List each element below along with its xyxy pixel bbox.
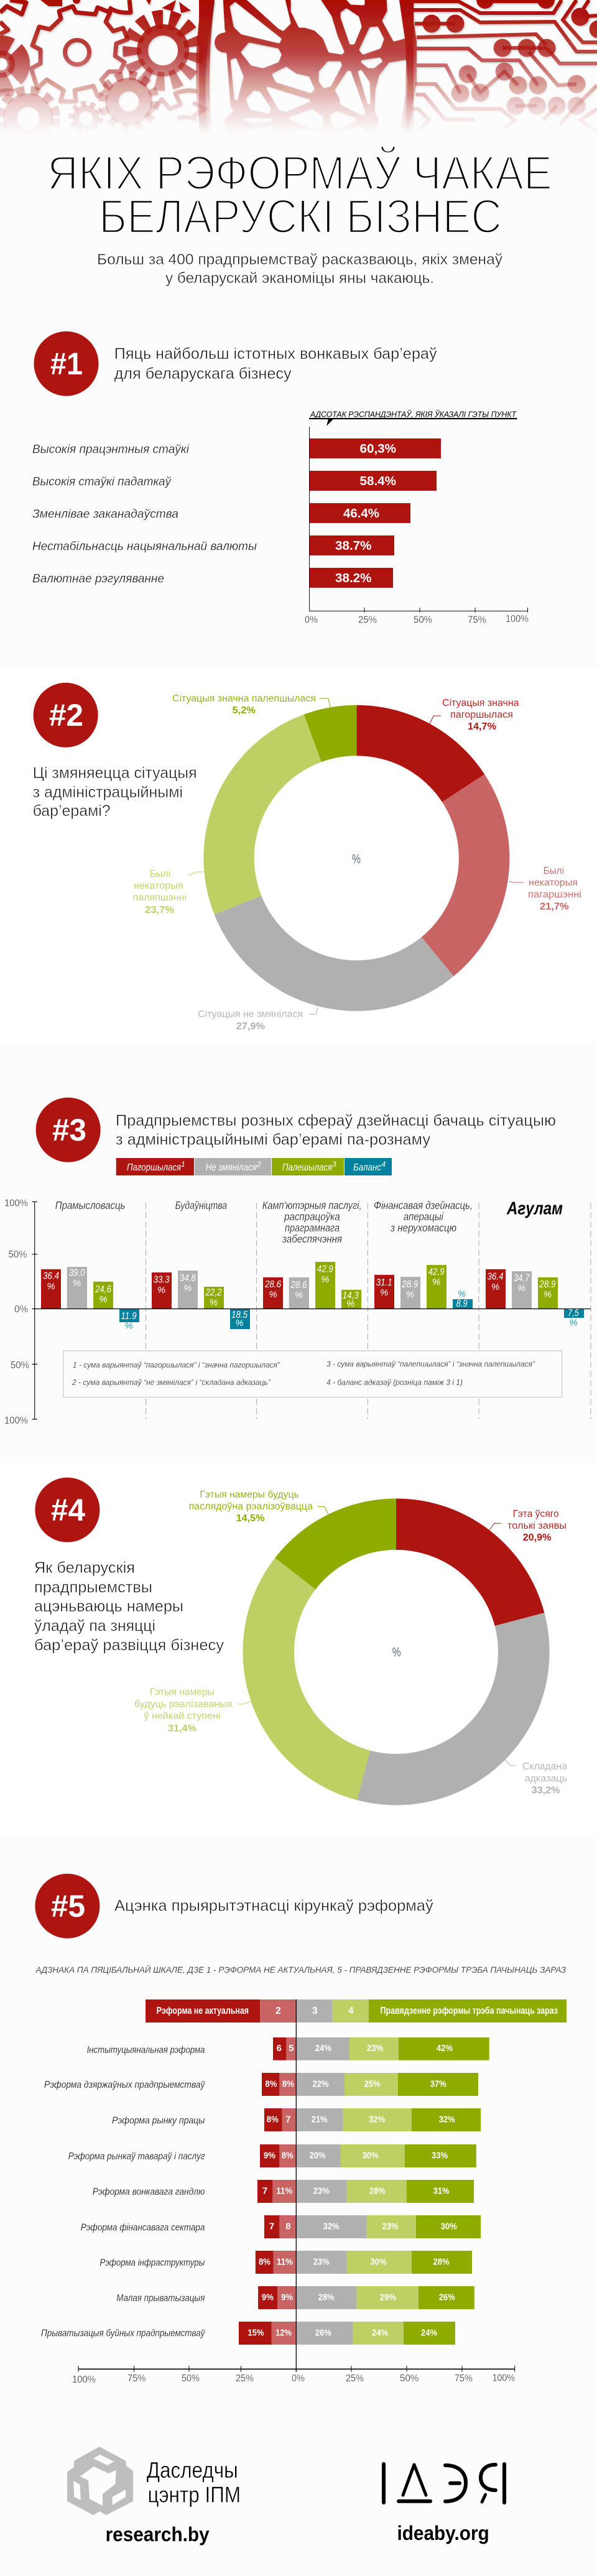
bar values: %	[124, 1321, 133, 1332]
heading 1: Пяць найбольш істотных вонкавых бар’ераў	[114, 345, 437, 363]
heading 4: бар’ераў развіцця бізнесу	[34, 1637, 224, 1654]
axis: 50%	[400, 2373, 419, 2384]
row: labour market: Рэформа рынку працы	[112, 2116, 205, 2126]
vertical axis: 0%	[14, 1304, 28, 1315]
row: goods and services: 30%	[363, 2151, 379, 2161]
label: unchanged	[198, 1008, 318, 1032]
legend: Палешылася	[282, 1162, 332, 1173]
label: some improvement	[133, 869, 204, 915]
row: large privatisation: 26%	[315, 2328, 331, 2338]
badge #5: #5	[51, 1889, 85, 1924]
label: some improvement: некаторыя	[134, 881, 183, 891]
badge #4	[35, 1478, 100, 1542]
label: implemented to some degree: Гэтыя намеры	[150, 1687, 215, 1698]
axis: 25%	[236, 2373, 254, 2384]
panel: section 2 background	[0, 669, 597, 1042]
legend: 4	[382, 1160, 386, 1169]
heading 2: бар’ерамі?	[33, 802, 111, 820]
title: ЯКІХ РЭФОРМАЎ ЧАКАЕ	[47, 146, 552, 200]
row: small privatisation: Малая прыватызацыя	[116, 2293, 205, 2304]
sector titles: Прамысловасць	[55, 1199, 125, 1212]
row: goods and services: Рэформа рынкаў тавараў і паслуг	[68, 2151, 205, 2162]
scale legend: 2	[275, 2006, 281, 2016]
axis: 100%	[72, 2374, 96, 2385]
row: state enterprises: 22%	[312, 2079, 328, 2090]
label: implemented gradually: паслядоўна рэалізоўвацца	[189, 1501, 313, 1512]
badge #2	[34, 683, 98, 748]
row: institutional reform: 6	[277, 2043, 282, 2054]
bar values: %	[47, 1281, 55, 1292]
sector titles: распрацоўка	[284, 1210, 340, 1223]
bar values: 31.1	[376, 1277, 392, 1288]
bar values: 18.5	[231, 1310, 248, 1320]
notes box: 1 - сума варыянтаў “пагоршылася” і “значна пагоршылася”	[73, 1360, 280, 1369]
scale caption: АДЗНАКА ПА ПЯЦІБАЛЬНАЙ ШКАЛЕ, ДЗЕ 1 - РЭФОРМА НЕ АКТУАЛЬНАЯ, 5 - ПРАВЯДЗЕННЕ РЭФОРМЫ ТРЭБА ПАЧЫНАЦЬ ЗАРАЗ	[35, 1964, 566, 1975]
label: unchanged: Сітуацыя не змянілася	[198, 1009, 303, 1020]
label: some worsening: некаторыя	[529, 878, 578, 888]
bar chart: barriers	[32, 427, 529, 625]
label: implemented to some degree: ў нейкай ступені	[144, 1711, 220, 1721]
bar values: %	[346, 1299, 354, 1309]
heading 4	[34, 1559, 224, 1654]
badge #3: #3	[52, 1113, 86, 1147]
scale legend: 4	[348, 2006, 354, 2016]
donut chart 4	[243, 1499, 550, 1805]
legend: Баланс	[353, 1162, 381, 1173]
footer logo: IDEA	[384, 2464, 504, 2544]
bar values: %	[295, 1290, 303, 1300]
row: large privatisation: 24%	[421, 2328, 437, 2338]
label: much better: Сітуацыя значна палепшылася	[172, 693, 316, 704]
subtitle: у беларускай эканоміцы яны чакаюць.	[165, 270, 434, 287]
scale legend	[146, 1999, 567, 2022]
label: much better: 5,2%	[233, 705, 256, 716]
bar values: %	[432, 1277, 440, 1287]
heading 4: ўладаў па зняцці	[34, 1617, 155, 1634]
badge #1	[34, 331, 98, 396]
bar values: %	[491, 1282, 499, 1292]
label: implemented to some degree	[134, 1687, 251, 1734]
vertical axis: 100%	[4, 1198, 28, 1209]
bar values: 33.3	[154, 1274, 170, 1285]
label: implemented gradually: Гэтыя намеры будуць	[200, 1490, 299, 1500]
bar values: %	[99, 1294, 108, 1305]
legend: 2	[256, 1160, 261, 1169]
vertical axis: 50%	[11, 1360, 29, 1371]
bar values: 42.9	[428, 1267, 445, 1277]
vertical axis	[4, 1198, 37, 1426]
axis: 50%	[182, 2373, 200, 2384]
bar values: 36.4	[488, 1272, 504, 1282]
row: small privatisation: 9%	[262, 2292, 274, 2303]
label: some worsening: 21,7%	[540, 902, 569, 912]
panel: section 4 intentions	[34, 1478, 567, 1805]
panel: section 4 background	[0, 1463, 597, 1837]
label: much worse: пагоршылася	[450, 710, 513, 720]
bar values: %	[321, 1274, 329, 1285]
label: implemented to some degree: будуць рэалізаваныя	[134, 1699, 232, 1710]
bar values: %	[157, 1285, 165, 1295]
sector titles: з нерухомасцю	[390, 1221, 456, 1234]
heading 2: з адміністрацыйнымі	[33, 784, 183, 801]
badge #2: #2	[49, 698, 83, 733]
panel: section 1 barriers	[32, 331, 529, 625]
row: large privatisation: Прыватызацыя буйных прадпрыемстваў	[41, 2328, 205, 2338]
legend	[116, 1158, 392, 1175]
heading 4: Як беларускія	[34, 1559, 135, 1577]
legend: Не змянілася	[206, 1162, 257, 1173]
category labels: Зменлівае заканадаўства	[32, 507, 178, 521]
bar values: 34.8	[180, 1273, 196, 1284]
axis: 0%	[305, 614, 318, 625]
row: labour market: 7	[285, 2115, 291, 2124]
bar values: 22,2	[205, 1287, 222, 1298]
label: implemented gradually: 14,5%	[236, 1513, 265, 1524]
bar values	[43, 1264, 579, 1332]
bar values: 39.0	[69, 1267, 85, 1278]
row: goods and services	[68, 2144, 476, 2167]
row: small privatisation	[116, 2286, 474, 2309]
legend: 3	[332, 1160, 336, 1169]
chart caption with pointer: АДСОТАК РЭСПАНДЭНТАЎ, ЯКІЯ ЎКАЗАЛІ ГЭТЫ ПУНКТ	[310, 409, 517, 419]
bar values: %	[73, 1278, 81, 1289]
row: institutional reform: 24%	[315, 2043, 331, 2054]
category labels: Высокія працэнтныя стаўкі	[32, 443, 190, 456]
bar values: %	[210, 1297, 218, 1308]
row: institutional reform	[87, 2037, 489, 2060]
row: institutional reform: 42%	[437, 2043, 453, 2054]
row: goods and services: 33%	[432, 2151, 448, 2161]
axis: 75%	[127, 2373, 146, 2384]
row: infrastructure: 23%	[313, 2256, 330, 2267]
row: financial sector: Рэформа фінансавага сектара	[81, 2222, 205, 2233]
row: state enterprises	[44, 2073, 478, 2096]
illustration: gears	[0, 0, 215, 146]
axis: 100%	[506, 614, 529, 624]
row: financial sector: 30%	[441, 2222, 457, 2232]
heading 4: прадпрыемствы	[34, 1578, 152, 1596]
notes box: 4 - баланс адказаў (розніца паміж 3 і 1)	[326, 1378, 463, 1387]
row: foreign trade: 7	[262, 2185, 267, 2197]
row: state enterprises: Рэформа дзяржаўных прадпрыемстваў	[44, 2080, 205, 2090]
row: foreign trade: Рэформа вонкавага гандлю	[93, 2187, 205, 2197]
row: labour market	[112, 2108, 481, 2131]
badge #5	[35, 1874, 100, 1939]
bar values: %	[517, 1283, 525, 1294]
label: unchanged: 27,9%	[236, 1021, 265, 1032]
donut chart 2	[203, 705, 509, 1011]
notes box	[63, 1351, 562, 1397]
axis: 25%	[346, 2373, 364, 2384]
label: some worsening: Былі	[544, 866, 564, 876]
notes box: 2 - сума варыянтаў “не змянілася” і “складана адказаць”	[72, 1378, 271, 1387]
heading 1: для беларускага бізнесу	[114, 365, 292, 382]
row: goods and services: 8%	[282, 2151, 294, 2161]
bar values: 36.4	[43, 1271, 59, 1282]
bar values: 7,5	[568, 1308, 579, 1318]
bar values: 24,6	[95, 1284, 111, 1295]
header illustration: gears, network and circuit	[0, 0, 597, 131]
heading 2: Ці змяняецца сітуацыя	[33, 764, 197, 782]
bar values: 28.9	[401, 1279, 418, 1290]
sector titles: Камп'ютэрныя паслугі,	[262, 1199, 362, 1212]
row: large privatisation	[41, 2322, 455, 2345]
category labels: Высокія стаўкі падаткаў	[32, 475, 172, 489]
bar values: 11.9	[121, 1311, 137, 1322]
row: financial sector: 7	[269, 2222, 274, 2232]
panel: section 5 reform priorities	[35, 1874, 567, 2385]
label: hard to answer: 33,2%	[532, 1786, 560, 1796]
row: large privatisation: 12%	[275, 2328, 292, 2338]
illustration: network	[199, 0, 414, 137]
axis	[72, 1999, 515, 2385]
row: financial sector	[81, 2215, 481, 2238]
row: financial sector: 32%	[323, 2222, 340, 2232]
row: small privatisation: 29%	[380, 2292, 396, 2303]
illustration: circuit	[399, 0, 597, 136]
bar values: %	[269, 1289, 277, 1300]
label: hard to answer: адказаць	[525, 1774, 567, 1784]
label: some improvement: Былі	[150, 869, 170, 879]
bar values: 28.6	[264, 1279, 281, 1290]
badge #1: #1	[50, 346, 83, 381]
bar values: %	[380, 1287, 388, 1298]
bar values: 34.7	[514, 1273, 530, 1284]
category labels	[32, 443, 257, 586]
icon: IPM hexagon	[67, 2447, 133, 2515]
row: institutional reform: 23%	[367, 2043, 383, 2054]
row: foreign trade: 23%	[313, 2185, 330, 2197]
axis: 100%	[493, 2373, 515, 2384]
row: small privatisation: 28%	[318, 2292, 335, 2303]
label: implemented to some degree: 31,4%	[168, 1723, 197, 1734]
label: some worsening	[509, 866, 581, 912]
vertical axis: 50%	[9, 1249, 27, 1260]
label: some improvement: 23,7%	[145, 905, 174, 915]
icon: IDEA wordmark	[384, 2464, 504, 2503]
bar values: 60,3%	[359, 442, 396, 456]
axis: 0%	[292, 2373, 305, 2384]
row: labour market: 8%	[267, 2115, 279, 2124]
category labels: Валютнае рэгуляванне	[32, 572, 164, 586]
row: financial sector: 23%	[382, 2222, 398, 2232]
row: infrastructure: Рэформа інфраструктуры	[100, 2258, 205, 2268]
scale legend: 3	[312, 2006, 318, 2016]
row: goods and services: 9%	[264, 2151, 275, 2161]
axis	[305, 427, 529, 625]
row: foreign trade: 28%	[369, 2185, 386, 2197]
legend: Пагоршылася	[127, 1162, 181, 1173]
row: foreign trade	[93, 2180, 474, 2203]
footer logo: IPM research center	[67, 2447, 241, 2546]
bar values: %	[235, 1318, 244, 1328]
row: state enterprises: 25%	[364, 2079, 381, 2090]
label: hard to answer: Складана	[522, 1761, 567, 1772]
footer logo: IDEA: ideaby.org	[397, 2522, 489, 2544]
heading 5: Ацэнка прыярытэтнасці кірункаў рэформаў	[114, 1897, 433, 1915]
row: infrastructure	[100, 2251, 472, 2274]
scale legend: Рэформа не актуальная	[157, 2006, 249, 2016]
subtitle: Больш за 400 прадпрыемстваў расказваюць, якіх зменаў	[97, 251, 502, 268]
row: state enterprises: 8%	[265, 2079, 277, 2090]
row: state enterprises: 37%	[430, 2079, 447, 2090]
heading 4: ацэньваюць намеры	[34, 1598, 183, 1615]
row: large privatisation: 24%	[372, 2328, 388, 2338]
bar values: 38.2%	[335, 572, 372, 585]
heading 2	[33, 764, 197, 820]
row: foreign trade: 11%	[276, 2185, 292, 2197]
heading 1	[114, 345, 437, 382]
axis: 25%	[358, 614, 377, 625]
chart caption with pointer	[309, 409, 517, 426]
label: much worse	[430, 698, 519, 732]
bar values: 28.9	[539, 1279, 555, 1290]
label: only statements: Гэта ўсяго	[513, 1509, 559, 1519]
row: small privatisation: 9%	[281, 2292, 293, 2303]
sector titles: праграмнага	[285, 1221, 340, 1234]
row: small privatisation: 26%	[439, 2292, 455, 2303]
subtitle	[97, 251, 502, 287]
footer logo: IPM research center: research.by	[106, 2523, 210, 2546]
row: infrastructure: 28%	[433, 2256, 449, 2267]
vertical axis: 100%	[4, 1415, 28, 1426]
label: much worse: 14,7%	[468, 721, 496, 732]
label: some improvement: паляпшэнні	[133, 892, 187, 903]
row: institutional reform: Інстытуцыянальная рэформа	[87, 2045, 205, 2055]
panel: section 3 by sector	[4, 1098, 591, 1426]
label: much worse: Сітуацыя значна	[442, 698, 519, 708]
heading 3	[116, 1112, 556, 1148]
notes box: 3 - сума варыянтаў “палепшылася” і “значна палепшылася”	[326, 1360, 535, 1369]
axis: 75%	[455, 2373, 473, 2384]
row: infrastructure: 8%	[259, 2256, 271, 2267]
column chart: sectors: Агулам	[506, 1199, 563, 1219]
donut chart 4: %	[392, 1646, 401, 1660]
row: labour market: 32%	[369, 2115, 385, 2124]
label: only statements: 20,9%	[523, 1532, 552, 1543]
label: only statements: толькі заявы	[507, 1521, 567, 1531]
title	[47, 146, 552, 244]
label: hard to answer	[505, 1759, 567, 1796]
row: large privatisation: 15%	[248, 2328, 264, 2338]
row: labour market: 21%	[312, 2115, 328, 2124]
footer logo: IPM research center: Даследчы	[147, 2457, 238, 2483]
sector titles	[55, 1199, 473, 1245]
heading 3: Прадпрыемствы розных сфераў дзейнасці бачаць сітуацыю	[116, 1112, 556, 1129]
badge #3	[36, 1098, 101, 1162]
bar values: %	[406, 1289, 414, 1300]
bar values: 8.9	[456, 1299, 468, 1309]
badge #4: #4	[51, 1493, 85, 1527]
legend: 1	[181, 1160, 185, 1169]
bar values: %	[458, 1289, 466, 1299]
row: institutional reform: 5	[289, 2043, 294, 2054]
title: БЕЛАРУСКІ БІЗНЕС	[99, 190, 502, 244]
bar values: %	[544, 1289, 552, 1300]
label: only statements	[489, 1509, 567, 1543]
sector titles: забеспячэння	[282, 1233, 342, 1245]
donut chart 2: %	[352, 852, 361, 866]
row: infrastructure: 30%	[371, 2256, 387, 2267]
category labels: Нестабільнасць нацыянальнай валюты	[32, 540, 257, 554]
bar values: 42.9	[317, 1264, 333, 1275]
label: implemented gradually	[189, 1490, 328, 1524]
bars	[309, 438, 441, 588]
row: state enterprises: 8%	[282, 2079, 294, 2090]
stacked bar chart: reforms	[41, 1999, 515, 2385]
label: some worsening: пагаршэнні	[528, 889, 581, 900]
row: labour market: 32%	[439, 2115, 455, 2124]
bar values: 58.4%	[359, 475, 396, 488]
sector dividers	[146, 1203, 591, 1419]
bar values: 28.6	[290, 1280, 307, 1290]
scale legend: Правядзенне рэформы трэба пачынаць зараз	[381, 2006, 558, 2016]
bar values: %	[183, 1283, 192, 1294]
footer logo: IPM research center: цэнтр ІПМ	[148, 2481, 241, 2507]
label: much better	[172, 693, 330, 716]
zero line	[32, 1309, 591, 1310]
heading 3: з адміністрацыйнымі бар’ерамі па-рознаму	[116, 1131, 430, 1148]
bar values	[335, 442, 396, 585]
bar values: %	[569, 1317, 578, 1328]
bars	[41, 1262, 584, 1329]
axis: 75%	[468, 614, 486, 625]
column chart: sectors	[4, 1198, 591, 1426]
row: foreign trade: 31%	[433, 2185, 449, 2197]
row: financial sector: 8	[285, 2222, 291, 2232]
row: goods and services: 20%	[310, 2151, 326, 2161]
sector titles: Фінансавая дзейнасць,	[374, 1199, 473, 1212]
panel: section 2 administrative barriers	[33, 683, 581, 1032]
bar values: 14,3	[343, 1290, 359, 1301]
sector titles: Будаўніцтва	[175, 1199, 227, 1212]
axis: 50%	[414, 614, 432, 625]
sector titles: аперацыі	[404, 1210, 444, 1223]
bar values: 38.7%	[335, 539, 372, 553]
row: infrastructure: 11%	[277, 2256, 293, 2267]
bar values: 46.4%	[343, 507, 379, 521]
